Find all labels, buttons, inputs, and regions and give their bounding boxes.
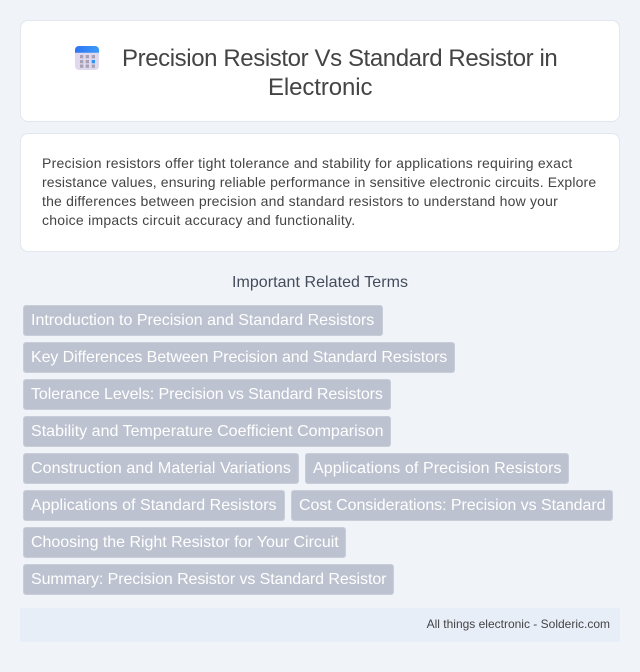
panel: related term tags <box>23 305 613 595</box>
tag <box>23 564 394 595</box>
text block: description: the differences between precision and standard resistors to understand how your <box>42 193 558 209</box>
text block: description: Precision resistors offer tight tolerance and stability for applications requiring exact <box>42 155 573 171</box>
tag: Construction and Material Variations <box>31 460 291 477</box>
tag: Cost Considerations: Precision vs Standard <box>299 497 606 514</box>
title: Electronic <box>268 74 372 101</box>
title <box>122 45 557 101</box>
footer text: All things electronic - Solderic.com <box>427 617 610 631</box>
tag: Applications of Precision Resistors <box>313 460 562 477</box>
tag <box>23 305 383 336</box>
tag <box>23 527 346 558</box>
tag <box>23 379 391 410</box>
tag <box>291 490 613 521</box>
text block: description: resistance values, ensuring reliable performance in sensitive electronic circuits. Explore <box>42 174 596 190</box>
tag <box>305 453 569 484</box>
tag <box>23 342 455 373</box>
text block: description <box>42 155 596 228</box>
tag: Key Differences Between Precision and Standard Resistors <box>31 349 447 366</box>
tag <box>23 416 391 447</box>
tag: Choosing the Right Resistor for Your Circuit <box>31 534 339 551</box>
text block: description: choice impacts circuit accuracy and functionality. <box>42 212 355 228</box>
icon: calendar <box>75 46 99 70</box>
tag: Applications of Standard Resistors <box>31 497 277 514</box>
panel: header card <box>20 20 620 122</box>
heading: important related terms: Important Related Terms <box>232 274 408 291</box>
tag: Stability and Temperature Coefficient Comparison <box>31 423 384 440</box>
tag: Introduction to Precision and Standard Resistors <box>31 312 374 329</box>
title: Precision Resistor Vs Standard Resistor in <box>122 45 557 72</box>
panel: description card <box>20 133 620 252</box>
footer <box>20 608 620 642</box>
tag <box>23 453 299 484</box>
tag <box>23 490 285 521</box>
tag: Summary: Precision Resistor vs Standard Resistor <box>31 571 386 588</box>
tag: Tolerance Levels: Precision vs Standard Resistors <box>31 386 383 403</box>
